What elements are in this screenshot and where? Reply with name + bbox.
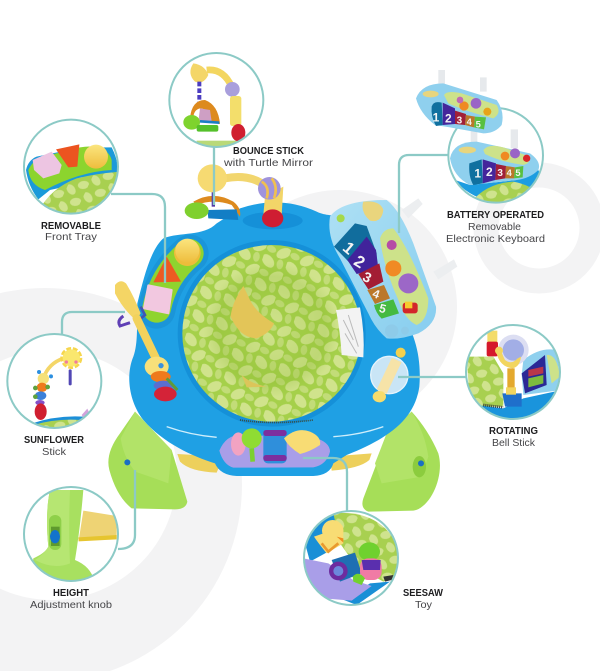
removed keyboard: 1 (433, 111, 440, 125)
toy: left leg (108, 412, 187, 509)
toy: electronic keyboard: 2 (351, 251, 368, 272)
label: sunflower stick (24, 434, 84, 458)
inset: height knob (24, 487, 118, 583)
toy: rotating bell (371, 348, 408, 402)
label: bounce stick: BOUNCE STICK (233, 145, 304, 157)
label: removable front tray: Front Tray (45, 231, 98, 243)
inset: bounce stick (169, 53, 263, 147)
removed keyboard: 3 (457, 115, 463, 126)
label: rotating bell stick (489, 425, 538, 449)
connector lines (62, 146, 467, 549)
label: height adjustment: Adjustment knob (30, 599, 112, 611)
toy: bounce stick with turtle (185, 164, 283, 227)
label: battery operated: Electronic Keyboard (446, 233, 545, 245)
toy: sunflower stick (115, 281, 177, 401)
label: battery operated: BATTERY OPERATED (447, 209, 544, 221)
toy: blue body (129, 202, 420, 476)
toy: right leg (362, 412, 440, 512)
inset: seesaw toy (303, 511, 399, 605)
label: sunflower stick: SUNFLOWER (24, 434, 84, 446)
label: battery operated: Removable (468, 221, 521, 233)
toy: electronic keyboard: 5 (378, 301, 388, 316)
label: seesaw toy (403, 587, 443, 611)
inset: sunflower stick (7, 334, 101, 433)
inset: battery keyboard: 2 (486, 165, 493, 179)
label: rotating bell stick: ROTATING (489, 425, 538, 437)
toy: electronic keyboard: 1 (339, 238, 358, 258)
label: seesaw toy: SEESAW (403, 587, 443, 599)
label: seesaw toy: Toy (415, 599, 433, 611)
removed keyboard: 4 (467, 117, 473, 127)
inset: battery keyboard: 5 (515, 168, 521, 178)
label: removable front tray: REMOVABLE (41, 220, 101, 232)
label: bounce stick (223, 145, 314, 169)
inset: front tray (24, 120, 120, 217)
inset: battery keyboard (448, 108, 543, 210)
jumper toy (108, 198, 457, 512)
label: removable front tray (41, 220, 101, 243)
removed keyboard: 2 (445, 112, 452, 126)
toy: yellow frame (177, 453, 372, 473)
label: height adjustment: HEIGHT (53, 587, 90, 599)
toy: electronic keyboard: 3 (360, 268, 374, 286)
removed keyboard (416, 70, 503, 133)
toy: removable front tray (144, 239, 201, 313)
label: sunflower stick: Stick (42, 446, 67, 458)
inset: battery keyboard: 1 (474, 167, 481, 181)
toy: seesaw (219, 428, 330, 468)
toy: seat cushion (182, 245, 364, 422)
toy: electronic keyboard (329, 198, 457, 339)
removed keyboard: 5 (476, 119, 481, 129)
inset: battery keyboard: 4 (507, 168, 513, 178)
inset: battery keyboard: 3 (497, 168, 503, 179)
label: battery operated (446, 209, 545, 245)
label: rotating bell stick: Bell Stick (492, 437, 536, 449)
toy: electronic keyboard: 4 (371, 286, 382, 302)
label: bounce stick: with Turtle Mirror (223, 157, 314, 169)
label: height adjustment (30, 587, 112, 611)
inset: rotating bell stick (466, 325, 562, 423)
